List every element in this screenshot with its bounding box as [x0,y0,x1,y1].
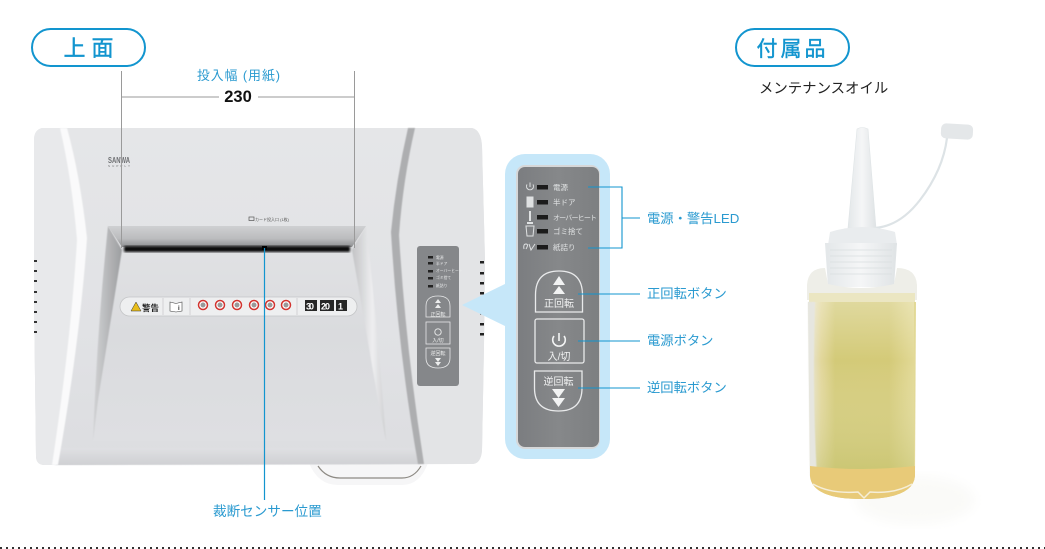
small control panel: 入/切 [432,337,444,344]
right wing stripe [391,128,424,464]
illustration: shredder top view [34,128,485,485]
left wing [34,128,86,465]
oil lower band [810,466,915,499]
button: forward [536,271,582,312]
strap cap [941,123,973,140]
heading: accessories: 付属品 [756,38,828,61]
led labels: 半ドア [553,197,576,207]
shredder body [34,128,485,465]
left vents [34,260,37,333]
card slot mark [249,216,290,222]
right wing [398,128,485,464]
bottle left reflection [808,302,817,478]
label: feed width: 投入幅 (用紙) [197,68,280,83]
card slot mark: カード投入口 (1枚) [255,216,290,222]
small control panel: ゴミ捨て [436,275,451,280]
callout pointer [462,283,507,327]
led labels: 紙詰り [553,242,576,252]
led labels: ゴミ捨て [553,226,583,236]
button: reverse [534,371,582,411]
small control panel: 半ドア [436,261,448,266]
paper tray [93,226,386,441]
bottle neck [825,243,897,287]
value: 230: 230 [224,88,252,106]
small control panel: オーバーヒート [436,268,463,273]
panel: enlarged controls [505,154,610,459]
bottle strap [875,138,947,228]
small control panel: 正回転 [430,312,446,318]
right tray wall [352,226,386,441]
right vents [480,261,484,336]
warning label strip: 警告 [142,303,159,313]
button: reverse: 逆回転 [544,375,574,388]
warning label strip [120,297,357,316]
bottle shadow [855,476,975,524]
bottom dotted divider [0,547,1045,549]
warning label strip: 1 [338,302,343,312]
small control panel: 電源 [436,255,444,260]
brand logo: SANWA [108,155,130,165]
heading: top view [32,29,145,66]
illustration: oil bottle [807,123,975,524]
callout: forward button: 正回転ボタン [647,286,727,301]
bottle oil body [808,302,916,499]
slot lip [108,226,366,247]
button: power: 入/切 [548,351,570,363]
width dimension [121,68,354,248]
feed slot [124,246,350,252]
small control panel [417,246,463,386]
button: power [535,319,584,363]
callout: power button [578,333,713,348]
brand logo [108,155,130,168]
callout: power and warning LED [588,187,739,248]
lower edge shade [55,448,420,465]
callout: sensor position: 裁断センサー位置 [213,504,322,519]
brand logo: SUPPLY [108,164,130,168]
led icons [524,182,535,250]
small control panel: 紙詰り [436,283,447,288]
callout: power and warning LED: 電源・警告LED [647,211,739,226]
left wing highlight [52,128,87,465]
heading: accessories [736,29,849,66]
bottle shoulder [807,268,917,300]
callout: reverse button: 逆回転ボタン [647,380,727,395]
label: maintenance oil: メンテナンスオイル [759,81,888,97]
led labels: 電源 [553,183,568,192]
nozzle [848,128,876,228]
small control panel: 逆回転 [430,350,446,357]
led labels: オーバーヒート [553,214,597,222]
shredder handle [309,463,428,485]
callout: power button: 電源ボタン [647,333,713,348]
led labels [553,183,597,252]
warning label strip: i [178,306,180,312]
heading: top view: 上 面 [63,36,114,61]
left tray wall [93,226,122,441]
led indicators [537,185,548,250]
bottle collar [828,227,897,245]
warning label strip: 30 [306,302,314,312]
sensor notch [262,246,267,250]
warning label strip: 20 [321,302,330,312]
button: forward: 正回転 [544,298,574,310]
